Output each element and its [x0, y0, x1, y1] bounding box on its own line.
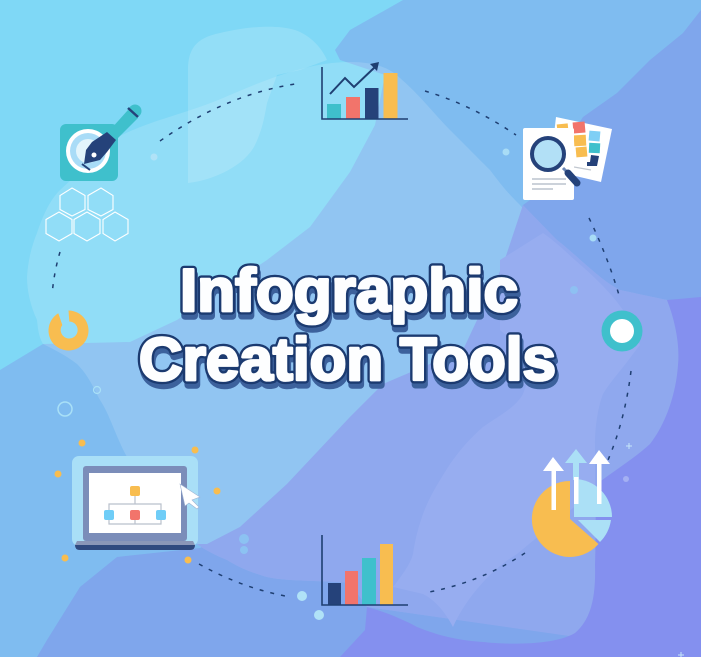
title white fill layer — [139, 257, 556, 393]
icon: hexagon cluster — [46, 188, 128, 241]
title — [139, 257, 558, 398]
icon: yellow ring node — [49, 310, 89, 351]
title white fill layer: Creation Tools — [139, 326, 556, 393]
title outline layer — [139, 257, 556, 393]
title shadow layer: Creation Tools — [140, 331, 558, 398]
icon: pie chart with up arrows — [532, 449, 612, 557]
icon: documents with magnifier — [523, 117, 612, 200]
title shadow layer — [140, 262, 558, 398]
title outline layer: Infographic — [180, 257, 518, 324]
dashed orbit ring — [52, 84, 631, 596]
icon: growth bar chart — [322, 62, 408, 119]
icon: teal ring node — [602, 310, 642, 352]
icon: pen tool on target — [60, 104, 142, 181]
title white fill layer: Infographic — [180, 257, 518, 324]
icon: laptop with flowchart — [54, 440, 220, 564]
title shadow layer: Infographic — [181, 262, 519, 329]
icon: bar chart bottom — [322, 535, 408, 605]
decorative bubbles — [58, 148, 684, 657]
title outline layer: Creation Tools — [139, 326, 556, 393]
